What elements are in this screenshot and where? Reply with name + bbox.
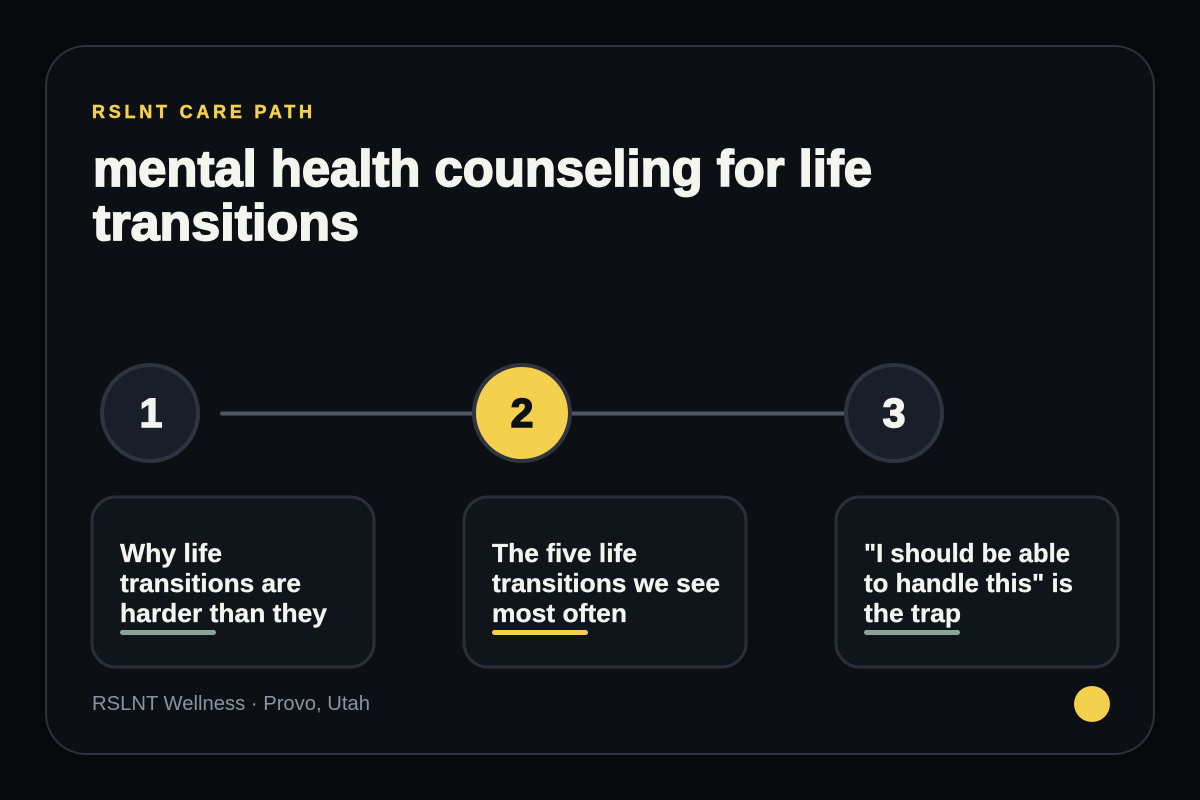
title: transitions: [93, 194, 359, 251]
step 1 text: harder than they: [120, 598, 328, 628]
icon: yellow dot: [1074, 686, 1110, 722]
footer text: RSLNT Wellness · Provo, Utah: [92, 692, 370, 715]
step 3 marker: 3: [883, 390, 905, 436]
step 1 text: Why life: [120, 538, 222, 568]
step 2 text: most often: [492, 598, 627, 628]
panel: step 3 card: [836, 497, 1118, 667]
step 1 text: transitions are: [120, 568, 301, 598]
step 1 text: [120, 538, 328, 628]
title: [93, 140, 872, 251]
step 2 marker: 2: [511, 390, 533, 436]
step 3 marker: [846, 365, 942, 461]
step 2 underline: [492, 630, 588, 635]
step 3 text: the trap: [864, 598, 961, 628]
title: mental health counseling for life: [93, 140, 872, 197]
connector: step 2 to step 3: [570, 412, 846, 416]
step 1 underline: [120, 630, 216, 635]
step 2 text: [492, 538, 720, 628]
step 2 text: transitions we see: [492, 568, 720, 598]
step 3 underline: [864, 630, 960, 635]
step 2 text: The five life: [492, 538, 637, 568]
panel: step 1 card: [92, 497, 374, 667]
step 1 marker: [102, 365, 198, 461]
step 3 text: [864, 538, 1073, 628]
step 3 text: to handle this" is: [864, 568, 1073, 598]
step 3 text: "I should be able: [864, 538, 1070, 568]
step 2 marker: [474, 365, 570, 461]
eyebrow label: RSLNT CARE PATH: [92, 102, 312, 122]
step 1 marker: 1: [140, 390, 162, 436]
connector: step 1 to step 2: [220, 412, 474, 416]
panel: step 2 card: [464, 497, 746, 667]
